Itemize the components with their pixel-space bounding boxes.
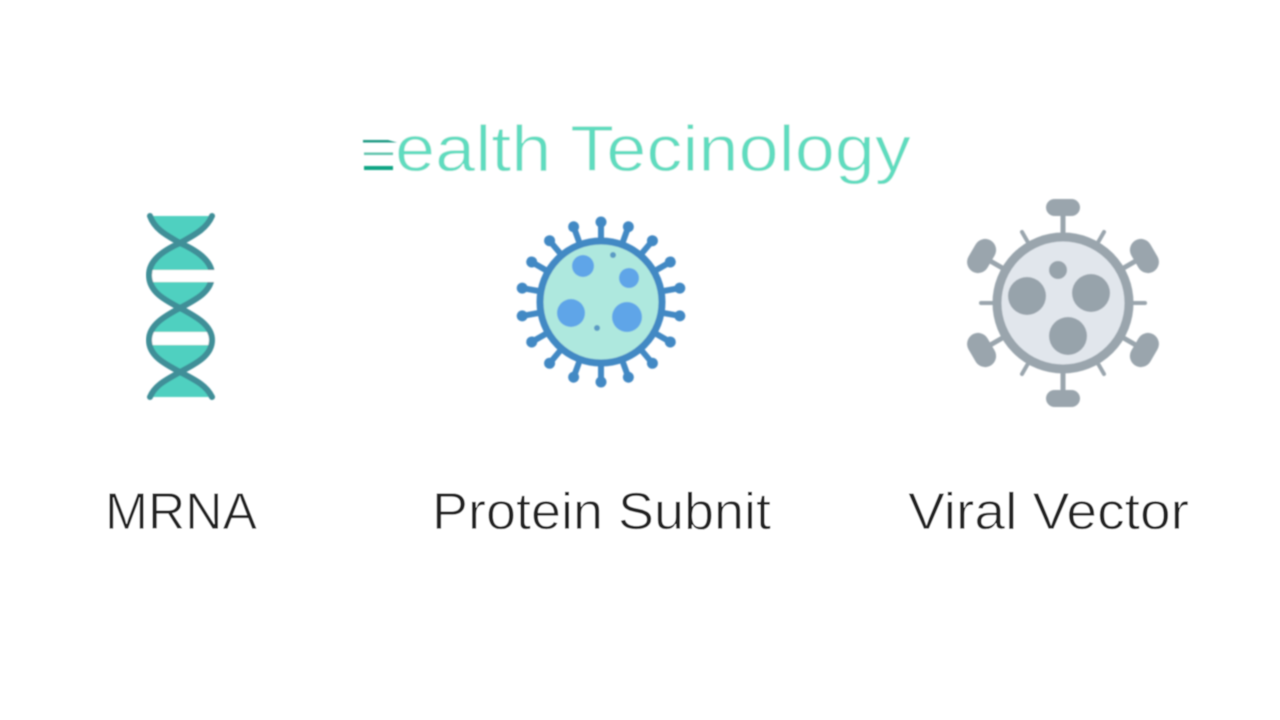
label: Viral Vector: Viral Vector (908, 483, 1189, 541)
icon: animated title bars replacing the H (363, 140, 397, 170)
icon: protein subunit virus (516, 216, 686, 388)
icon: DNA helix (149, 216, 218, 397)
label: Protein Subnit: Protein Subnit (432, 483, 772, 541)
label: MRNA: MRNA (105, 483, 257, 541)
icon: viral vector virus (963, 199, 1163, 407)
title: ealth Tecinology (395, 112, 912, 185)
